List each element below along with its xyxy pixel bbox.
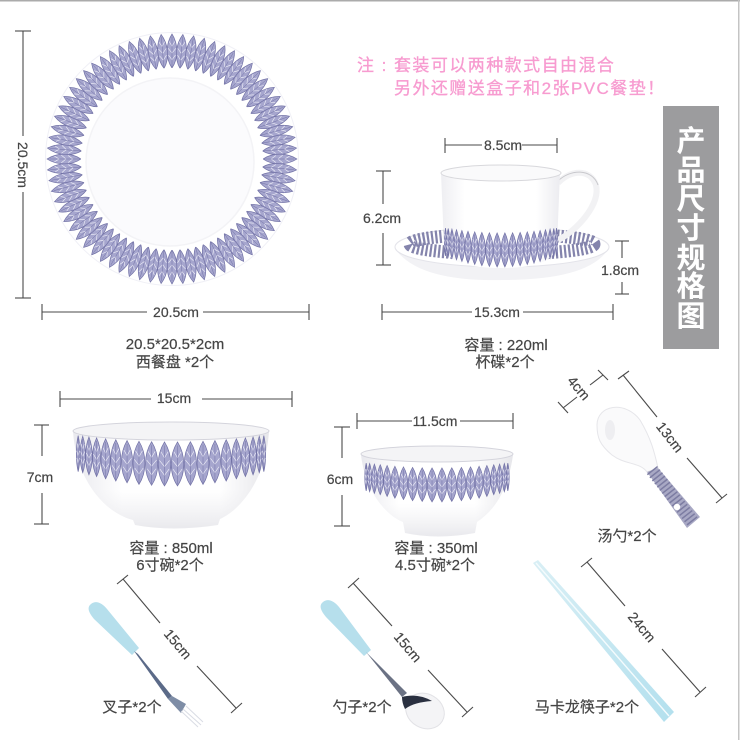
label: small bowl: 容量 : 350ml: [394, 540, 478, 557]
panel: dinner plate: [15, 11, 320, 371]
label: teaspoon: 勺子*2个: [332, 699, 392, 716]
panel: fork: [89, 575, 242, 727]
label: plate: 20.5*20.5*2cm: [126, 336, 224, 353]
icon: small bowl: [361, 446, 513, 536]
panel: teaspoon: [321, 578, 473, 736]
dimension: spoon width: [558, 370, 608, 413]
dimension: small bowl height: [327, 427, 353, 526]
label: small bowl: 4.5寸碗*2个: [395, 557, 475, 574]
panel: title tab: 尺: [676, 184, 706, 216]
panel: cup and saucer: [363, 136, 639, 371]
dimension: saucer width: 15.3cm: [474, 304, 520, 320]
dimension: spoon length: [618, 371, 727, 503]
dimension: teaspoon length: 15cm: [391, 629, 425, 665]
dimension: teaspoon length: [348, 578, 473, 717]
label: large bowl: 6寸碗*2个: [136, 557, 204, 574]
panel: title tab: 格: [676, 270, 706, 303]
icon: large bowl: [73, 422, 269, 528]
panel: title tab: 品: [676, 155, 706, 187]
label: large bowl: [129, 540, 213, 574]
label: plate: [126, 336, 224, 371]
dimension: fork length: 15cm: [161, 626, 195, 662]
panel: title tab: 图: [676, 301, 706, 333]
dimension: small bowl width: 11.5cm: [413, 413, 457, 429]
panel: title tab: 产: [676, 125, 706, 158]
panel: title tab: 规: [676, 242, 706, 275]
dimension: spoon length: 13cm: [653, 419, 687, 455]
panel: chopsticks: [533, 558, 706, 722]
panel: title tab: 寸: [676, 212, 706, 245]
dimension: chopsticks length: [581, 558, 706, 697]
label: small bowl: [394, 540, 478, 574]
panel: soup spoon: [558, 370, 727, 545]
label: plate: 西餐盘 *2个: [136, 353, 214, 371]
callout: note: 另外还赠送盒子和2张PVC餐垫！: [394, 79, 666, 98]
panel: small bowl: [327, 413, 513, 574]
label: large bowl: 容量 : 850ml: [129, 540, 213, 557]
callout: note: 注 : 套装可以两种款式自由混合: [357, 56, 615, 75]
dimension: chopsticks length: 24cm: [625, 609, 659, 645]
label: cup: 容量 : 220ml: [464, 337, 548, 354]
panel: title tab: [663, 106, 719, 349]
icon: soup spoon: [597, 407, 700, 528]
dimension: spoon width: 4cm: [564, 373, 594, 403]
icon: chopsticks: [533, 560, 674, 722]
dimension: saucer height: 1.8cm: [601, 262, 639, 278]
callout: note: [357, 56, 666, 98]
dimension: fork length: [117, 575, 242, 713]
dimension: small bowl height: 6cm: [327, 471, 353, 487]
icon: cup: [441, 165, 598, 268]
dimension: cup diameter: [445, 136, 557, 154]
label: soup spoon: 汤勺*2个: [597, 528, 657, 545]
icon: teaspoon: [321, 600, 451, 736]
dimension: large bowl height: [27, 425, 53, 524]
icon: saucer: [395, 227, 609, 280]
label: chopsticks: 马卡龙筷子*2个: [535, 699, 639, 716]
icon: fork: [89, 602, 203, 727]
dimension: cup height: [363, 171, 401, 265]
dimension: plate height: 20.5cm: [15, 142, 31, 188]
icon: plate with leaf rim: [24, 11, 320, 307]
dimension: large bowl width: 15cm: [157, 390, 191, 406]
dimension: plate width: 20.5cm: [153, 304, 199, 320]
dimension: large bowl height: 7cm: [27, 469, 53, 485]
panel: large bowl: [27, 390, 292, 574]
label: cup: [464, 337, 548, 371]
dimension: saucer height: [601, 241, 639, 294]
label: cup: 杯碟*2个: [475, 354, 535, 371]
dimension: cup height: 6.2cm: [363, 210, 401, 226]
dimension: cup diameter: 8.5cm: [484, 137, 522, 153]
label: fork: 叉子*2个: [102, 699, 162, 716]
